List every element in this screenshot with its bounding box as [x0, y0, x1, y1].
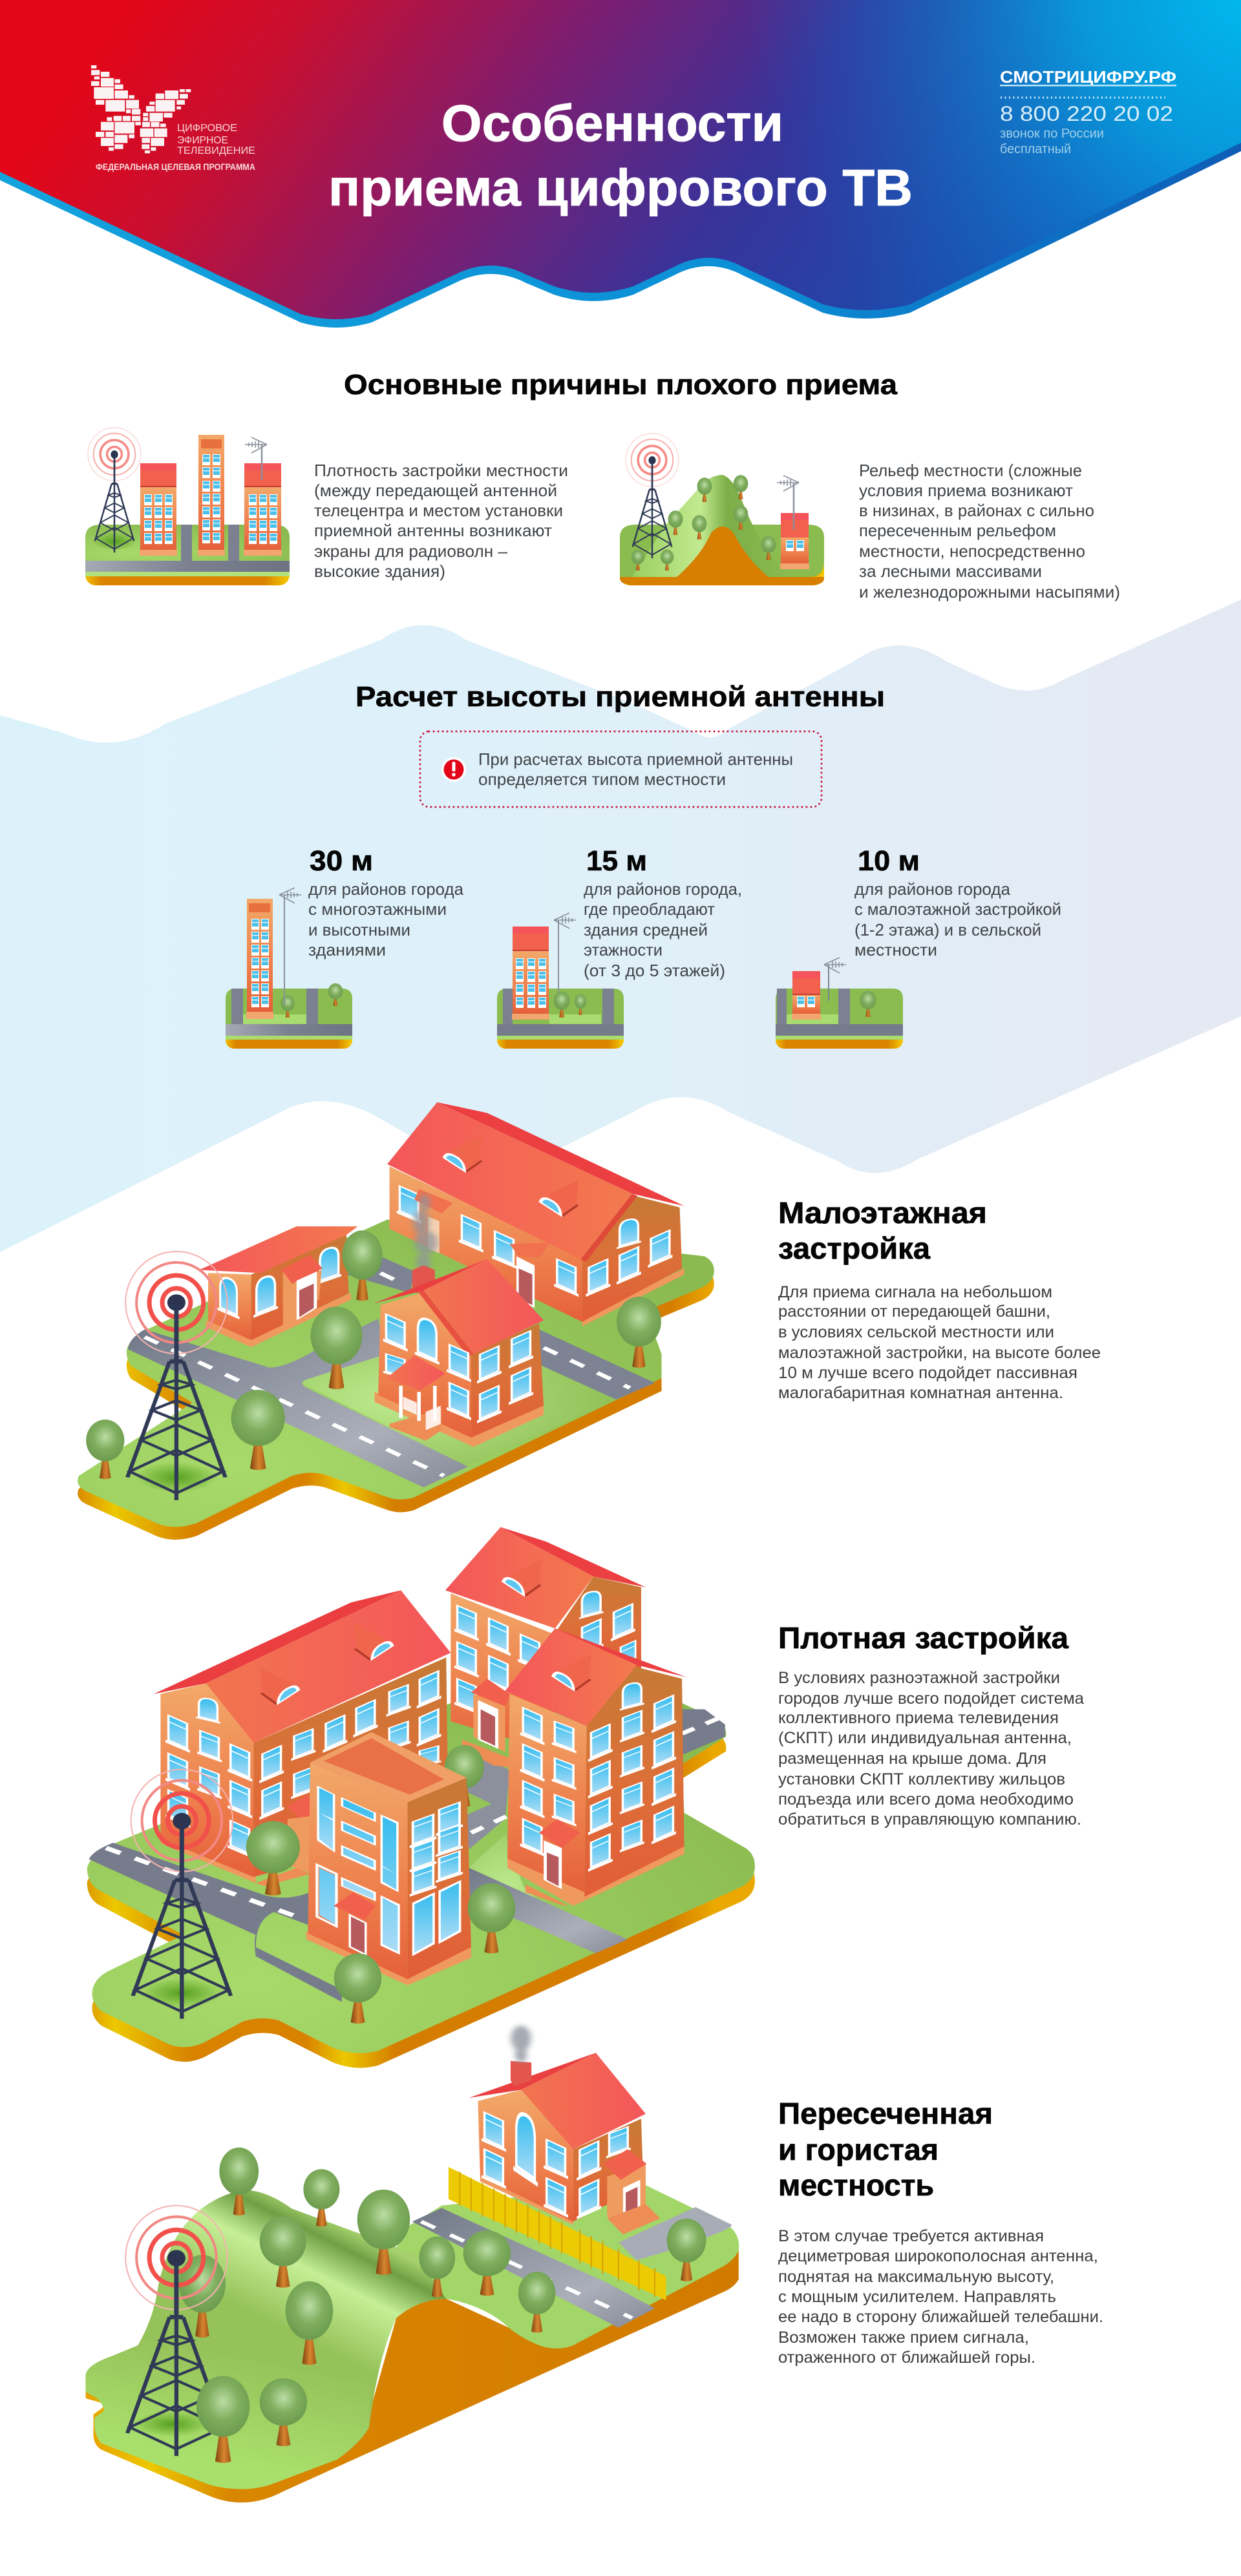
heading	[778, 1196, 987, 1265]
trees	[179, 2148, 706, 2365]
header: gradient banner	[0, 0, 1241, 328]
phone note: звонок по России	[1000, 127, 1104, 141]
icon: high-rise	[226, 888, 352, 1049]
header gradient fill	[0, 0, 1241, 319]
height value: 10 м	[858, 845, 920, 877]
heading: Плотная застройка	[778, 1621, 1068, 1655]
platform	[85, 556, 290, 585]
text: building density	[314, 461, 568, 581]
description: с малоэтажной застройкой	[854, 899, 1061, 919]
body: подъезда или всего дома необходимо	[778, 1790, 1074, 1808]
heading: местность	[778, 2168, 934, 2202]
text: terrain relief: пересеченным рельефом	[859, 521, 1056, 540]
body: поднятая на максимальную высоту,	[778, 2268, 1054, 2286]
light plot	[469, 1834, 596, 1953]
body: отраженного от ближайшей горы.	[778, 2349, 1035, 2367]
body: В этом случае требуется активная	[778, 2227, 1044, 2245]
body: малоэтажной застройки, на высоте более	[778, 1344, 1101, 1362]
platform top with road	[369, 2183, 739, 2349]
platform top	[78, 1220, 714, 1527]
text: hilly terrain	[778, 2097, 1103, 2367]
text: building density: приемной антенны возникают	[314, 521, 552, 540]
title: Особенности	[441, 94, 783, 152]
fence	[449, 2167, 666, 2300]
logo wordmark: ТЕЛЕВИДЕНИЕ	[177, 145, 255, 156]
column: 15 m	[497, 845, 742, 1049]
column: 30 m	[226, 845, 464, 1049]
tower with rings	[88, 428, 141, 552]
house	[469, 2053, 660, 2234]
road	[412, 2207, 732, 2328]
body: установки СКПТ коллективу жильцов	[778, 1770, 1065, 1788]
tree	[231, 1390, 285, 1470]
heading: Пересеченная	[778, 2097, 993, 2130]
hill	[86, 2190, 446, 2489]
icon: low-rise	[776, 958, 903, 1049]
body: размещенная на крыше дома. Для	[778, 1750, 1046, 1768]
description: и высотными	[308, 920, 410, 939]
body: 10 м лучше всего подойдет пассивная	[778, 1364, 1077, 1382]
contacts block	[1000, 67, 1176, 156]
long building	[154, 1590, 451, 1886]
icon: dense buildings	[85, 428, 290, 585]
text: building density: Плотность застройки местности	[314, 461, 568, 480]
scene: hilly terrain	[86, 2026, 739, 2502]
note text	[478, 749, 793, 789]
text: terrain relief: местности, непосредственно	[859, 541, 1085, 561]
body: коллективного приема телевидения	[778, 1709, 1059, 1727]
chimney	[412, 1265, 435, 1293]
green hill	[633, 475, 795, 577]
back building	[445, 1527, 646, 1767]
text: terrain relief	[859, 461, 1120, 602]
tower	[125, 2206, 228, 2456]
icon: butterfly of white rectangles	[91, 65, 191, 153]
icon: mid-rise	[497, 913, 624, 1049]
phone number: 8 800 220 20 02	[1000, 102, 1173, 125]
header cyan corner glow	[0, 0, 1241, 319]
description	[308, 879, 464, 959]
description: (1-2 этажа) и в сельской	[854, 920, 1041, 939]
note text: определяется типом местности	[478, 770, 726, 789]
description: где преобладают	[584, 899, 715, 919]
body: обратиться в управляющую компанию.	[778, 1810, 1081, 1828]
logo caption: ФЕДЕРАЛЬНАЯ ЦЕЛЕВАЯ ПРОГРАММА	[96, 162, 255, 172]
scene: dense city	[87, 1527, 755, 2068]
description	[584, 879, 742, 980]
logo: digital TV butterfly	[91, 65, 255, 172]
heading	[778, 2097, 993, 2202]
roads	[128, 1256, 655, 1487]
text: terrain relief: и железнодорожными насыпями)	[859, 582, 1120, 602]
tree	[334, 1953, 381, 2024]
description: зданиями	[308, 940, 386, 959]
body	[778, 2227, 1103, 2367]
body: (СКПТ) или индивидуальная антенна,	[778, 1729, 1072, 1747]
body	[778, 1283, 1101, 1402]
front house	[374, 1259, 544, 1447]
description: (от 3 до 5 этажей)	[584, 961, 725, 980]
orange hill section	[620, 577, 824, 585]
logo wordmark	[177, 123, 255, 156]
body: Возможен также прием сигнала,	[778, 2329, 1029, 2347]
front building	[306, 1732, 471, 1985]
body: малогабаритная комнатная антенна.	[778, 1384, 1063, 1402]
description: этажности	[584, 940, 663, 959]
phone note: бесплатный	[1000, 142, 1071, 156]
icon: relief hill	[620, 434, 824, 585]
note text: При расчетах высота приемной антенны	[478, 749, 793, 769]
body: ее надо в сторону ближайшей телебашни.	[778, 2308, 1103, 2326]
orange base and hill cut	[86, 2250, 739, 2502]
description: для районов города	[854, 879, 1011, 899]
scene: low-rise neighbourhood	[78, 1102, 714, 1540]
background: pale blue mountain band	[0, 600, 1241, 1252]
description: для районов города,	[584, 879, 742, 899]
heading: causes: Основные причины плохого приема	[344, 369, 898, 401]
big house	[387, 1102, 684, 1326]
tree	[617, 1297, 661, 1368]
body: расстоянии от передающей башни,	[778, 1303, 1050, 1321]
text: building density: экраны для радиоволн –	[314, 541, 508, 561]
tree	[468, 1883, 515, 1953]
body: В условиях разноэтажной застройки	[778, 1669, 1060, 1687]
height value: 30 м	[310, 845, 373, 877]
smoke	[413, 1194, 437, 1272]
tower	[131, 1770, 233, 2019]
heading: Малоэтажная	[778, 1196, 987, 1230]
website link: СМОТРИЦИФРУ.РФ	[1000, 67, 1176, 87]
body: дециметровая широкополосная антенна,	[778, 2247, 1098, 2265]
logo wordmark: ЭФИРНОЕ	[177, 135, 228, 146]
tree	[86, 1419, 124, 1479]
platform side	[78, 1233, 714, 1540]
tree	[311, 1306, 363, 1389]
body: городов лучше всего подойдет система	[778, 1690, 1084, 1708]
left house	[199, 1226, 358, 1347]
description	[854, 879, 1061, 959]
callout: note	[420, 731, 822, 807]
text: dense city	[778, 1621, 1084, 1828]
logo wordmark: ЦИФРОВОЕ	[177, 123, 237, 134]
text: building density: телецентра и местом установки	[314, 501, 563, 520]
text: terrain relief: условия приема возникают	[859, 481, 1073, 500]
platform	[620, 556, 824, 585]
tower with rings	[626, 434, 679, 558]
column: 10 m	[776, 845, 1061, 1049]
antenna	[245, 437, 267, 480]
text: terrain relief: за лесными массивами	[859, 561, 1042, 581]
roads	[89, 1709, 725, 2002]
right building	[505, 1628, 686, 1906]
tower	[125, 1251, 228, 1500]
height value: 15 м	[586, 845, 647, 877]
buildings	[140, 435, 282, 556]
tree	[246, 1821, 300, 1896]
text: terrain relief: в низинах, в районах с сильно	[859, 501, 1094, 520]
body: в условиях сельской местности или	[778, 1323, 1054, 1341]
tree	[445, 1745, 484, 1807]
heading: antenna height: Расчет высоты приемной антенны	[355, 681, 885, 713]
description: местности	[854, 940, 937, 959]
body: Для приема сигнала на небольшом	[778, 1283, 1052, 1301]
text: terrain relief: Рельеф местности (сложные	[859, 461, 1082, 480]
text: low-rise	[778, 1196, 1101, 1402]
trees	[631, 475, 776, 571]
light green plot	[301, 1345, 614, 1467]
house	[780, 513, 809, 569]
description: с многоэтажными	[308, 899, 447, 919]
smoke	[511, 2026, 531, 2062]
tree	[342, 1230, 383, 1301]
description: для районов города	[308, 879, 464, 899]
header cyan edge band	[0, 8, 1241, 328]
icon: exclamation	[441, 757, 466, 782]
body	[778, 1669, 1084, 1828]
heading: и гористая	[778, 2133, 939, 2166]
text: building density: высокие здания)	[314, 561, 445, 581]
description: здания средней	[584, 920, 708, 939]
platform side	[87, 1718, 755, 2068]
hill foreground meadow	[86, 2286, 369, 2489]
title: приема цифрового ТВ	[328, 159, 913, 216]
phone note	[1000, 127, 1104, 156]
body: с мощным усилителем. Направлять	[778, 2288, 1056, 2306]
text: building density: (между передающей антенной	[314, 481, 557, 500]
title	[328, 94, 913, 216]
heading: застройка	[778, 1231, 930, 1265]
antenna	[777, 476, 799, 530]
platform top	[87, 1703, 755, 2053]
foreground trees	[196, 2376, 307, 2463]
